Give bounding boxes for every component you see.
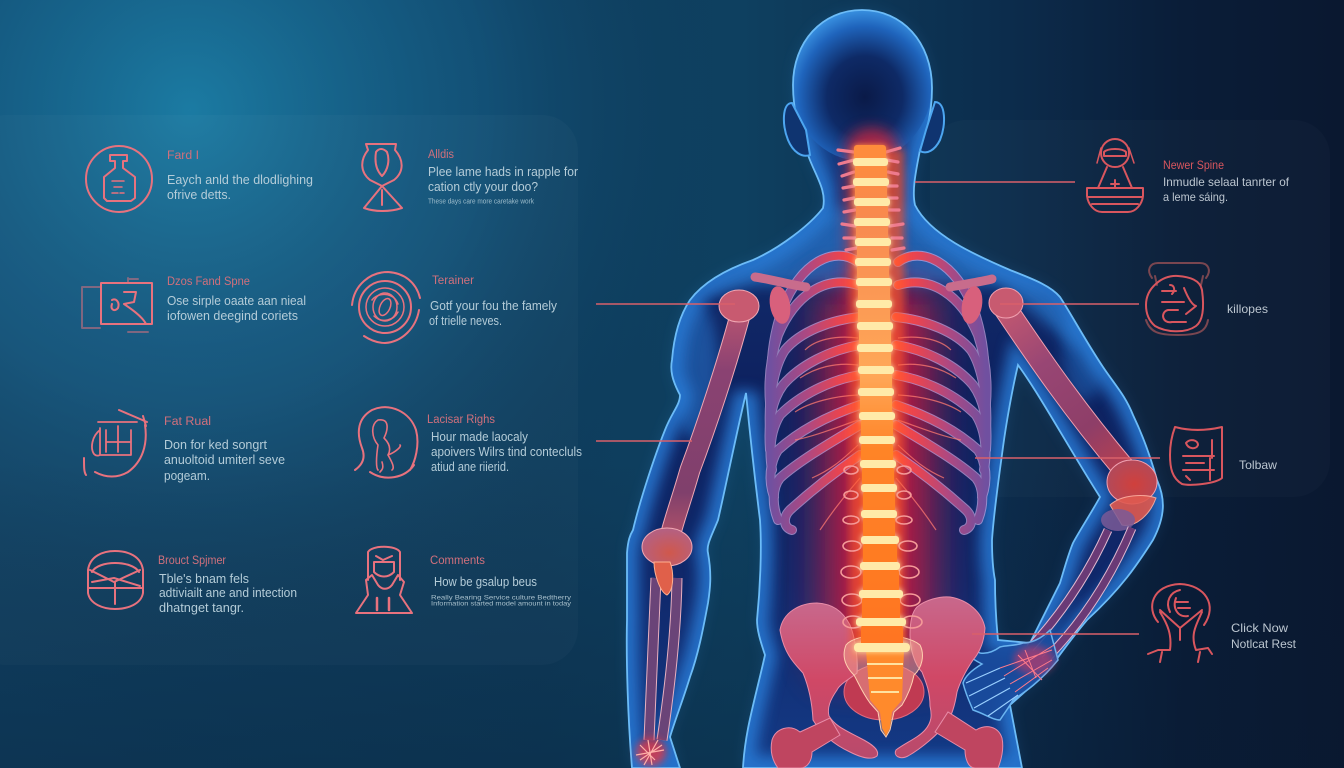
text: of trielle neves. — [429, 314, 502, 328]
item: Dzos Fand Spne — [82, 276, 306, 332]
icon: box — [82, 278, 152, 332]
panel: left info card — [0, 115, 578, 665]
body silhouette — [627, 9, 1163, 768]
icon: pouch — [1146, 263, 1209, 335]
text: ofrive detts. — [167, 188, 231, 202]
text: Terainer — [432, 275, 474, 287]
leader lines — [596, 182, 1160, 634]
text: Comments — [430, 555, 485, 567]
text: Alldis — [428, 149, 454, 161]
text — [164, 416, 285, 483]
text: Newer Spine — [1163, 160, 1224, 172]
item: Comments — [356, 547, 572, 613]
text: Inmudle selaal tanrter of — [1163, 175, 1290, 189]
item: killopes — [1146, 263, 1268, 335]
text: dhatnget tangr. — [159, 601, 244, 615]
item: Click Now — [1148, 584, 1297, 662]
icon: bottle — [86, 146, 152, 212]
text: Hour made laocaly — [431, 430, 529, 444]
icon: ring box — [84, 410, 147, 476]
human figure — [627, 9, 1163, 768]
icon: spiral — [352, 272, 420, 343]
text — [427, 414, 582, 474]
rib cage — [770, 256, 986, 530]
text: Fard I — [167, 150, 199, 162]
text — [167, 150, 313, 202]
text: Gotf your fou the famely — [430, 299, 558, 313]
icon: figure with arms — [1148, 584, 1212, 662]
label: Click Now — [1231, 621, 1288, 635]
text — [158, 555, 297, 615]
item: Fard I — [86, 146, 313, 212]
right hand — [962, 630, 1058, 720]
item: Fat Rual — [84, 410, 285, 483]
text: cation ctly your doo? — [428, 180, 538, 194]
spinal column glow — [850, 150, 904, 660]
text: Dzos Fand Spne — [167, 276, 250, 288]
label: killopes — [1227, 302, 1268, 316]
icon: dome — [88, 551, 143, 609]
text: anuoltoid umiterl seve — [164, 453, 285, 467]
icon: figure — [356, 547, 412, 613]
text: Ose sirple oaate aan nieal — [167, 294, 306, 308]
text: Plee lame hads in rapple for — [428, 165, 578, 179]
icon: figure on tray — [1087, 139, 1143, 212]
text — [1163, 160, 1290, 204]
label — [1231, 621, 1297, 651]
pelvis — [771, 597, 1003, 768]
text: iofowen deegind coriets — [167, 309, 298, 323]
item: Tolbaw — [1170, 427, 1277, 485]
panel: right info card — [930, 120, 1330, 497]
text — [428, 149, 578, 206]
text: Brouct Spjmer — [158, 555, 226, 567]
item: Lacisar Righs — [355, 407, 582, 478]
text: How be gsalup beus — [434, 575, 537, 589]
text: atiud ane riierid. — [431, 460, 509, 474]
label: Tolbaw — [1239, 458, 1277, 472]
text: pogeam. — [164, 469, 210, 483]
item: Alldis — [362, 144, 578, 211]
sacrum — [844, 635, 922, 737]
item: Brouct Spjmer — [88, 551, 297, 615]
icon: goblet — [362, 144, 402, 211]
text: adtiviailt ane and intection — [159, 586, 297, 600]
text: Tble's bnam fels — [159, 572, 249, 586]
text — [167, 276, 306, 323]
label: Notlcat Rest — [1231, 637, 1297, 651]
text — [429, 275, 558, 328]
text: a leme sáing. — [1163, 190, 1228, 204]
text: apoivers Wilrs tind contecluls — [431, 445, 582, 459]
item: Terainer — [352, 272, 558, 343]
vertebrae — [853, 145, 910, 652]
neck vertebra processes — [838, 148, 904, 250]
text: Fat Rual — [164, 416, 211, 428]
item: Newer Spine — [1087, 139, 1290, 212]
left arm bones — [636, 290, 759, 766]
text: Really Bearing Service culture Bedtherry — [431, 594, 572, 602]
text: Information started model amount in today — [431, 600, 572, 608]
right arm bones — [989, 288, 1157, 660]
text: Eaych anld the dlodlighing — [167, 173, 313, 187]
icon: framed tools — [1170, 427, 1222, 485]
text: Don for ked songrt — [164, 438, 268, 452]
text — [430, 555, 572, 608]
icon: head profile — [355, 407, 417, 478]
clavicles and scapulae — [755, 277, 992, 325]
ears — [784, 102, 944, 156]
text: Lacisar Righs — [427, 414, 495, 426]
text: These days care more caretake work — [428, 198, 534, 206]
lumbar vertebra processes — [841, 466, 922, 628]
